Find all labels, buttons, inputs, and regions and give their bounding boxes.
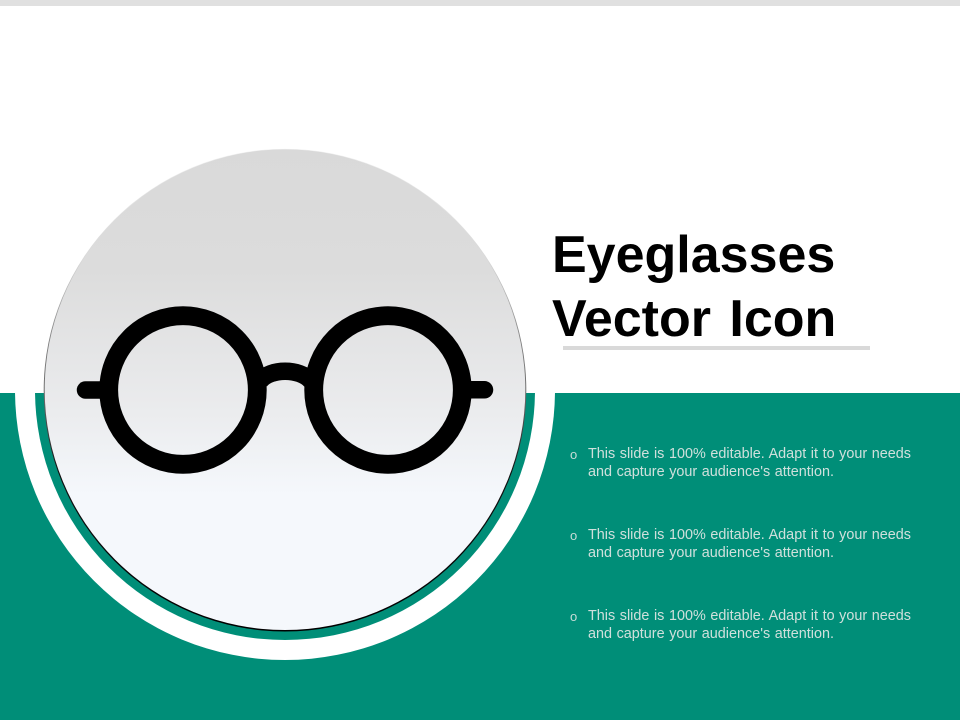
circle graphic with eyeglasses icon (15, 149, 555, 660)
bullet text 1: and capture your audience's attention. (588, 464, 834, 480)
green band (0, 393, 960, 720)
bullet text 1: This slide is 100% editable. Adapt it to your needs (588, 446, 911, 462)
bullet text 2: This slide is 100% editable. Adapt it to your needs (588, 527, 911, 543)
title (552, 226, 836, 348)
icon: eyeglasses (86, 316, 484, 464)
title: Vector Icon (552, 290, 836, 348)
bullet text 1 (570, 446, 911, 480)
bullet text 1: o (570, 447, 577, 462)
bullet text 3: and capture your audience's attention. (588, 626, 834, 642)
bullet text 2: and capture your audience's attention. (588, 545, 834, 561)
bullet text 3 (570, 608, 911, 642)
title underline (563, 346, 870, 350)
bullet text 2 (570, 527, 911, 561)
bullet text 3: This slide is 100% editable. Adapt it to your needs (588, 608, 911, 624)
bullet text 2: o (570, 528, 577, 543)
top bar (0, 0, 960, 6)
title: Eyeglasses (552, 226, 835, 284)
bullet text 3: o (570, 609, 577, 624)
